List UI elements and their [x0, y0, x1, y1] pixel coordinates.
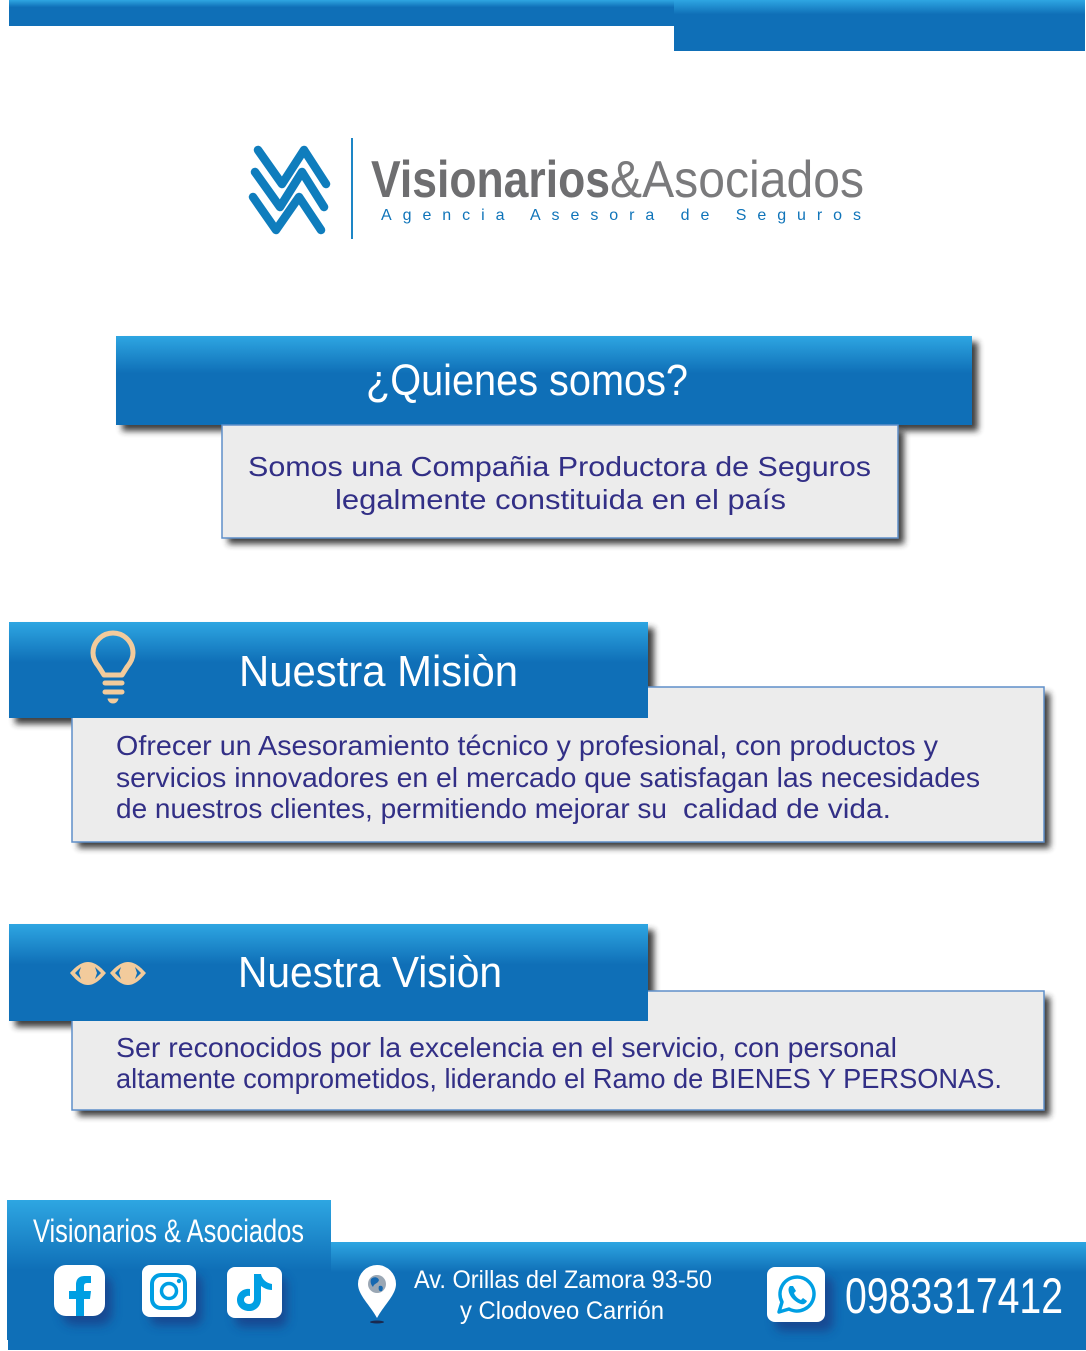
text block [116, 1032, 1002, 1094]
icon: whatsapp [767, 1267, 833, 1331]
text block: Somos una Compañia Productora de Seguros [248, 451, 871, 482]
text block: altamente comprometidos, liderando el Ramo de BIENES Y PERSONAS. [116, 1063, 1002, 1094]
panel: mision [9, 622, 1050, 848]
logo wordmark: Visionarios [371, 151, 610, 209]
icon: location pin [358, 1265, 396, 1324]
address: Av. Orillas del Zamora 93-50 [414, 1266, 712, 1294]
icon: instagram [142, 1265, 202, 1325]
icon: eyes [70, 962, 146, 985]
text block: Ser reconocidos por la excelencia en el servicio, con personal [116, 1032, 897, 1063]
text block: Ofrecer un Asesoramiento técnico y profesional, con productos y [116, 730, 938, 761]
icon: light bulb [93, 633, 133, 703]
top bar: right [674, 0, 1085, 51]
top bar: left [9, 0, 674, 26]
heading: ¿Quienes somos? [366, 356, 688, 405]
panel: vision [9, 924, 1050, 1116]
footer [7, 1200, 1086, 1350]
logo tagline: Agencia Asesora de Seguros [381, 207, 861, 224]
heading: Nuestra Misiòn [239, 647, 518, 696]
logo [253, 138, 864, 239]
logo wordmark second part: &Asociados [610, 151, 864, 209]
text block: de nuestros clientes, permitiendo mejorar su [116, 793, 667, 824]
logo mark [253, 150, 326, 230]
text block [248, 451, 871, 515]
logo divider [351, 138, 353, 239]
text block: legalmente constituida en el país [335, 484, 786, 515]
icon: tiktok [227, 1267, 287, 1327]
text block: calidad de vida. [683, 793, 891, 824]
panel: quienes somos [116, 336, 978, 544]
address: y Clodoveo Carrión [460, 1297, 664, 1325]
footer brand name: Visionarios & Asociados [33, 1213, 304, 1249]
text block: servicios innovadores en el mercado que satisfagan las necesidades [116, 762, 980, 793]
text block [116, 730, 980, 824]
heading: Nuestra Visiòn [238, 948, 502, 997]
address [414, 1266, 712, 1325]
icon: facebook [54, 1265, 112, 1325]
